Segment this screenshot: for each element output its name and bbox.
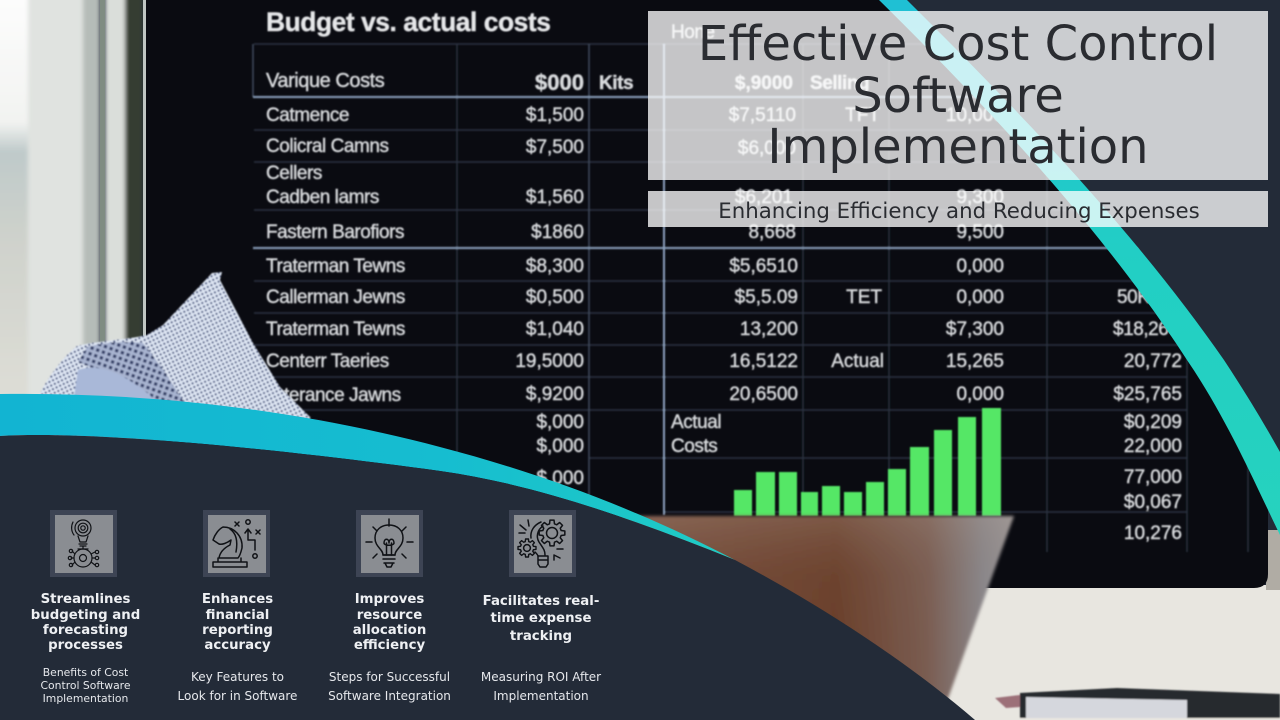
budget table: $5,6510 [729, 256, 798, 277]
window frame at left [0, 0, 143, 492]
heading: streamlines: budgeting and [31, 608, 140, 623]
caption: steps: Steps for Successful [329, 670, 450, 684]
heading: improves: efficiency [354, 638, 425, 653]
budget table: $7,500 [526, 137, 584, 158]
monitor [146, 0, 1268, 588]
column 3: steps [328, 510, 451, 703]
navy corner behind the accent band [900, 0, 1280, 460]
budget table: Actual [831, 351, 884, 372]
budget table: TFT [845, 105, 880, 126]
budget table: $000 [535, 70, 584, 95]
budget table: 22,000 [1124, 436, 1182, 457]
dark lower-left panel [0, 435, 975, 720]
heading: improves: Improves [355, 592, 424, 607]
budget table: $,000 [536, 436, 584, 457]
budget table: 10,276 [1124, 523, 1182, 544]
title panel [648, 11, 1268, 180]
budget table: $0,500 [526, 287, 584, 308]
heading: facilitates: time expense [491, 611, 591, 626]
budget table: Selling [810, 73, 869, 94]
budget table: 19,5000 [515, 351, 584, 372]
heading: streamlines: forecasting [43, 623, 128, 638]
budget table: Traterman Tewns [266, 319, 405, 340]
accent wave: lower left teal curve [0, 394, 735, 560]
budget table: 16,5122 [729, 351, 798, 372]
column 1: benefits [31, 510, 140, 705]
budget table: 77,000 [1124, 467, 1182, 488]
budget table: $0,209 [1124, 412, 1182, 433]
subtitle panel [648, 191, 1268, 227]
budget table: Cadben lamrs [266, 187, 379, 208]
budget table: $5,5.09 [735, 287, 798, 308]
budget table: $8,300 [526, 256, 584, 277]
budget table: $7,300 [946, 319, 1004, 340]
subtitle: Enhancing Efficiency and Reducing Expenses [718, 199, 1200, 224]
budget table: $,9000 [735, 73, 793, 94]
budget table: $,000 [536, 412, 584, 433]
caption: benefits: Implementation [43, 692, 128, 705]
title: Effective Cost Control [698, 16, 1218, 72]
budget table: 0,000 [956, 256, 1004, 277]
budget table: $1,560 [526, 187, 584, 208]
budget table: 50K [1117, 287, 1150, 308]
budget table: $6,201 [735, 187, 793, 208]
budget table: TET [846, 287, 882, 308]
budget table: Centerr Taeries [266, 351, 389, 372]
budget table: $6,000 [738, 138, 796, 159]
budget table: 13,200 [740, 319, 798, 340]
budget table: terance Jawns [284, 385, 401, 406]
budget table: 8,668 [748, 222, 796, 243]
budget table: $,000 [536, 468, 584, 489]
budget table: $0,067 [1124, 492, 1182, 513]
budget table: Varique Costs [266, 70, 385, 92]
heading: improves: resource [357, 608, 422, 623]
heading: enhances: reporting [202, 623, 273, 638]
budget table: $1,500 [526, 105, 584, 126]
budget table: Colicral Camns [266, 136, 389, 157]
heading: facilitates: Facilitates real- [483, 594, 599, 609]
caption: benefits: Control Software [40, 679, 131, 692]
budget table: Budget vs. actual costs [266, 7, 550, 37]
heading: facilitates: tracking [510, 629, 572, 644]
heading: enhances: accuracy [204, 638, 271, 653]
budget table: $1,040 [526, 319, 584, 340]
budget table: $,9200 [526, 384, 584, 405]
heading: enhances: financial [206, 608, 269, 623]
budget table: 9,500 [956, 222, 1004, 243]
icon: light bulb with circuit [50, 510, 117, 577]
budget table: 0,000 [956, 287, 1004, 308]
budget table: 9,300 [956, 187, 1004, 208]
caption: features: Look for in Software [178, 689, 297, 703]
budget table: Costs [671, 436, 717, 457]
caption: measuring: Measuring ROI After [481, 670, 601, 684]
title: Implementation [767, 119, 1149, 175]
budget table: Traterman Tewns [266, 256, 405, 277]
desk [600, 585, 1280, 720]
shirt collar [40, 272, 410, 445]
caption: steps: Software Integration [328, 689, 451, 703]
notebook on desk [995, 688, 1280, 720]
caption: features: Key Features to [191, 670, 284, 684]
budget table: 20,6500 [729, 384, 798, 405]
heading: improves: allocation [353, 623, 426, 638]
budget table [253, 7, 1248, 552]
caption: measuring: Implementation [493, 689, 589, 703]
budget table: $7,5110 [729, 105, 796, 126]
budget table: 10,000 [946, 105, 1004, 126]
budget table: 0,000 [956, 384, 1004, 405]
budget table: 15,265 [946, 351, 1004, 372]
heading: streamlines: Streamlines [41, 592, 131, 607]
budget table: $25,765 [1113, 384, 1182, 405]
accent band: upper right teal curve [879, 0, 1280, 535]
green bar chart on screen [734, 408, 1001, 516]
budget table: Callerman Jewns [266, 287, 405, 308]
budget table: $1860 [531, 222, 584, 243]
heading: streamlines: processes [48, 638, 123, 653]
budget table: 20,772 [1124, 351, 1182, 372]
caption: benefits: Benefits of Cost [43, 666, 128, 679]
column 2: features [178, 510, 297, 703]
heading: enhances: Enhances [202, 592, 273, 607]
icon: gears and bulb [509, 510, 576, 577]
budget table: Kits [599, 73, 633, 94]
title: Software [852, 68, 1064, 124]
icon: light bulb [356, 510, 423, 577]
budget table: Cellers [266, 163, 322, 184]
budget table: Catmence [266, 105, 349, 126]
budget table: Fastern Barofiors [266, 222, 404, 243]
budget table: Actual [671, 412, 721, 433]
icon: chess knight strategy [203, 510, 270, 577]
budget table: Hone [671, 22, 715, 43]
laptop lid [620, 516, 1014, 715]
budget table: $18,260 [1113, 319, 1179, 340]
column 4: measuring [481, 510, 601, 703]
